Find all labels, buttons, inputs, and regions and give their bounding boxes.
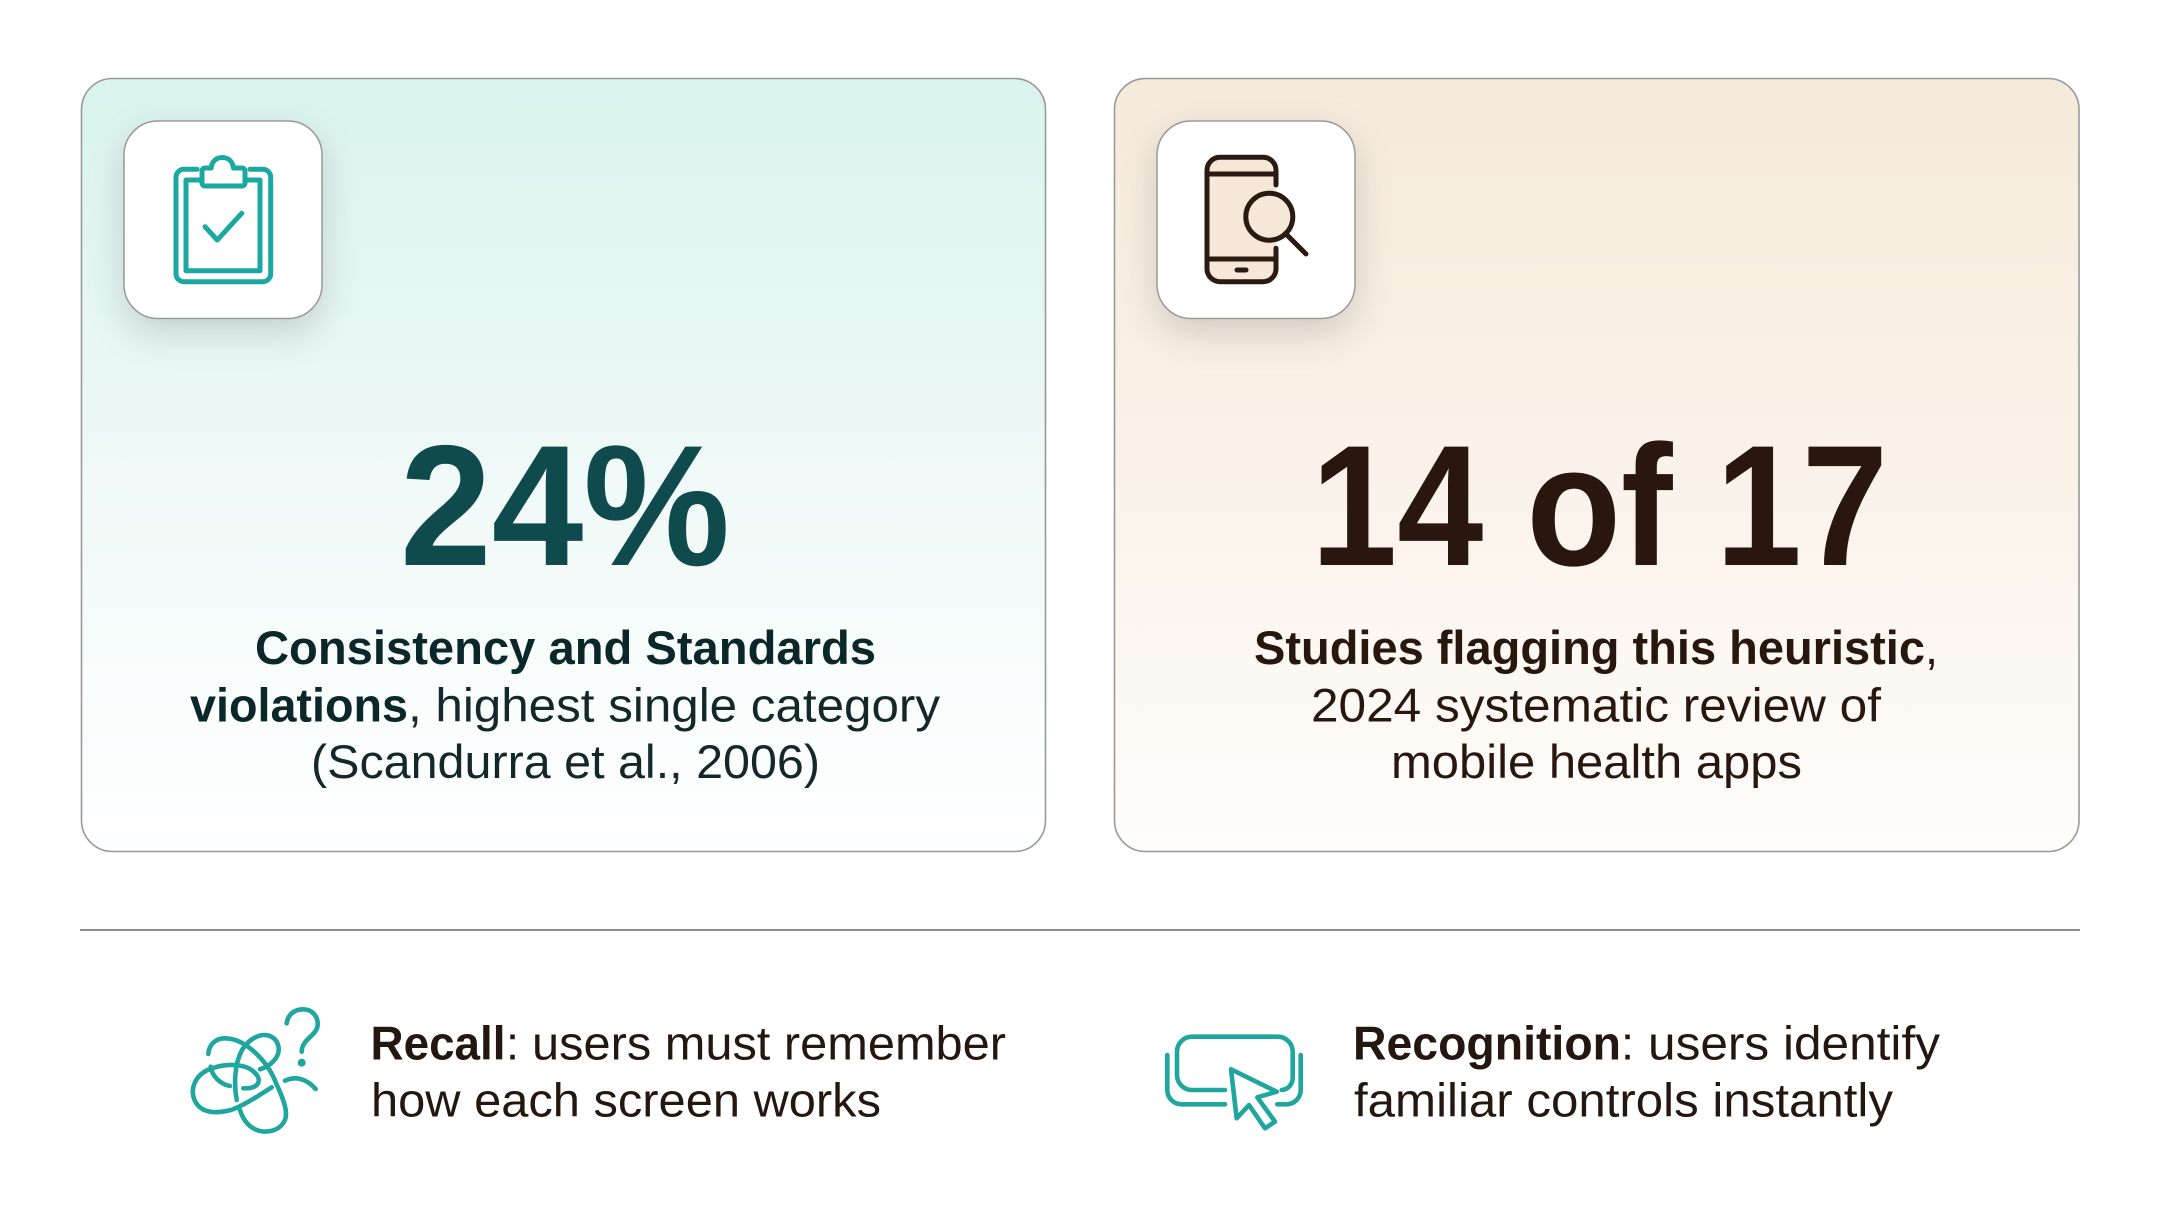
text block: studies description: mobile health apps <box>1391 735 1802 788</box>
stat: 24%: 24% <box>400 410 730 602</box>
text block: consistency description <box>190 621 941 788</box>
text: recognition definition: : <box>1621 1016 1634 1069</box>
stat: 14 of 17: 14 of 17 <box>1311 410 1888 602</box>
icon tile: phone with magnifier <box>1157 121 1355 318</box>
text block: consistency description: (Scandurra et al., 2006) <box>311 735 820 788</box>
icon: cursor clicking a button <box>1167 1037 1301 1128</box>
recognition item <box>1167 1016 1941 1128</box>
recall item <box>193 1009 1006 1132</box>
text: recall definition: users must remember <box>532 1016 1006 1069</box>
text block: consistency description: violations <box>190 678 408 732</box>
text: recall definition: : <box>506 1016 519 1069</box>
panel: mobile health studies stat <box>1114 78 2079 852</box>
text: recall definition <box>370 1016 1006 1126</box>
icon: tangled thread with question mark <box>193 1009 318 1132</box>
panel: consistency violations stat <box>82 78 1046 852</box>
text block: studies description <box>1254 621 1938 788</box>
text block: studies description: Studies flagging this heuristic <box>1254 621 1925 674</box>
text: recognition definition <box>1353 1016 1941 1126</box>
text: recognition definition: familiar controls instantly <box>1354 1074 1894 1126</box>
text: recall definition: how each screen works <box>371 1074 881 1126</box>
text block: consistency description: , highest single category <box>408 678 941 732</box>
icon tile: clipboard with check <box>124 121 322 318</box>
text: recognition definition: users identify <box>1648 1016 1941 1069</box>
text: recognition definition: Recognition <box>1353 1016 1621 1069</box>
divider <box>80 929 2080 931</box>
text block: studies description: 2024 systematic review of <box>1311 678 1882 732</box>
text block: consistency description: Consistency and Standards <box>255 621 876 674</box>
text block: studies description: , <box>1925 621 1938 674</box>
text: recall definition: Recall <box>370 1016 506 1069</box>
